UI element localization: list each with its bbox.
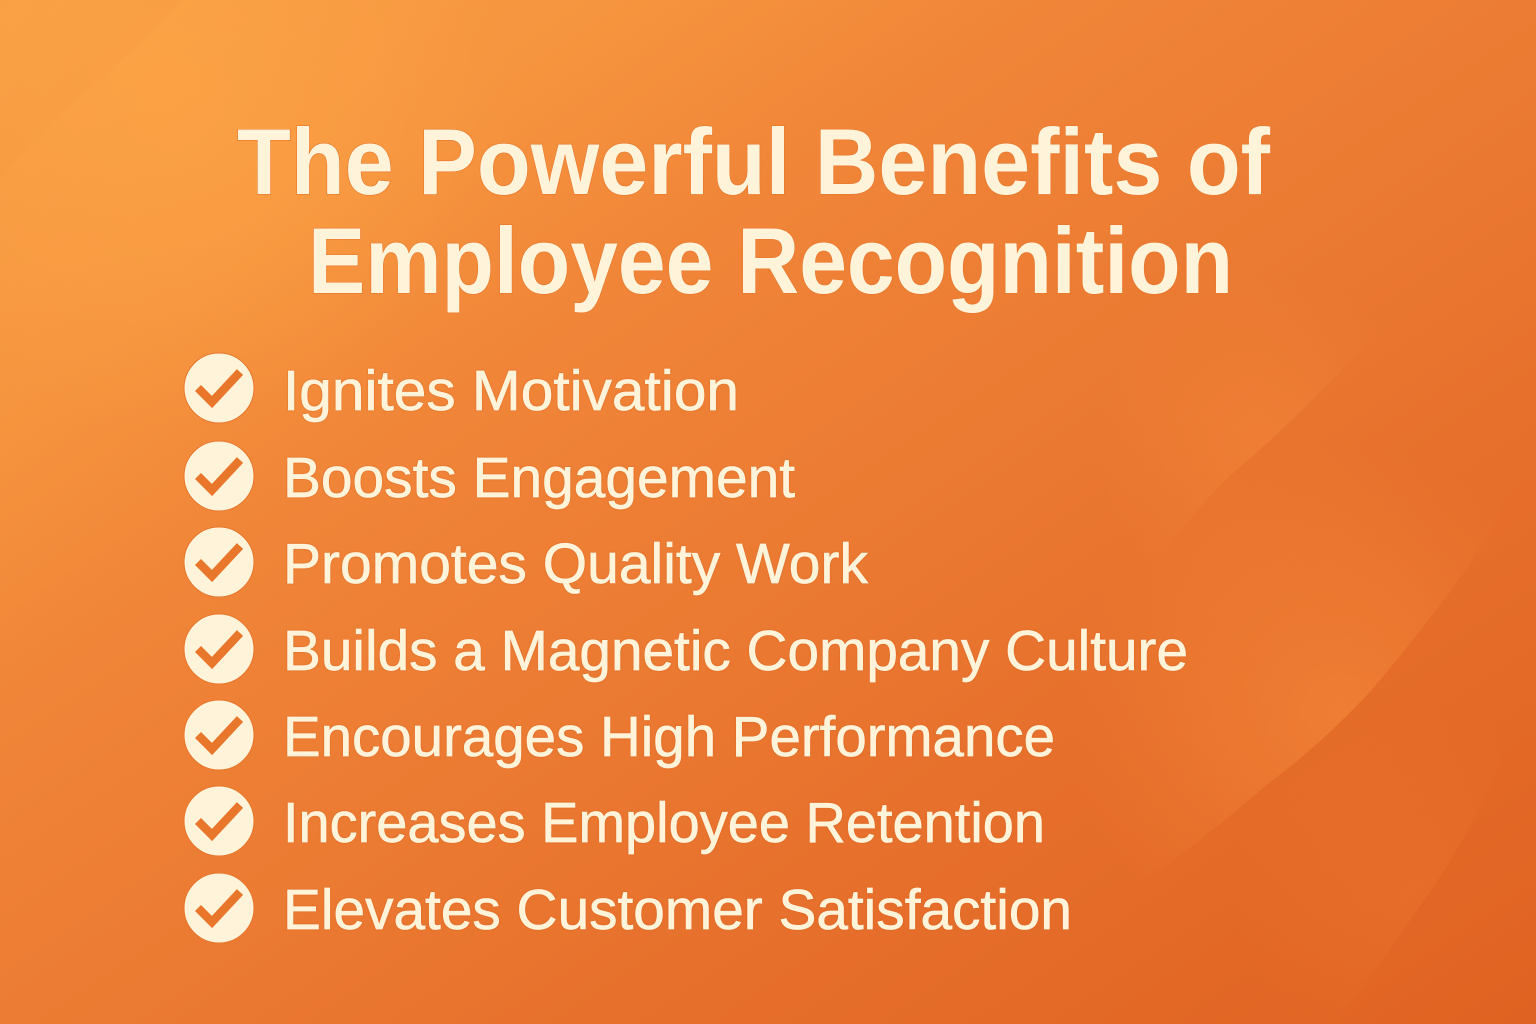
item: Promotes Quality Work: Promotes Quality Work xyxy=(283,532,868,596)
title: The Powerful Benefits of xyxy=(237,109,1271,214)
item: Increases Employee Retention: Increases Employee Retention xyxy=(283,791,1045,855)
item: Encourages High Performance: Encourages High Performance xyxy=(283,705,1055,769)
title: Employee Recognition xyxy=(308,208,1233,313)
item: Builds a Magnetic Company Culture: Builds a Magnetic Company Culture xyxy=(283,619,1188,683)
item: Elevates Customer Satisfaction: Elevates Customer Satisfaction xyxy=(283,878,1072,942)
item: Boosts Engagement: Boosts Engagement xyxy=(283,446,795,510)
benefits list xyxy=(184,353,1188,943)
title xyxy=(237,109,1271,313)
item: Ignites Motivation: Ignites Motivation xyxy=(283,359,739,423)
